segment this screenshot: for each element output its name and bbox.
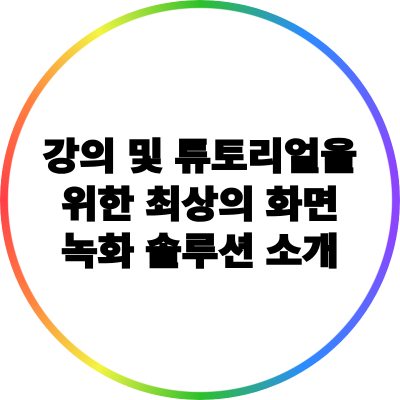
title: 강의 및 튜토리얼을 [43, 137, 357, 177]
title: 녹화 솔루션 소개 [61, 232, 339, 272]
title [42, 137, 357, 272]
title: 위한 최상의 화면 [61, 184, 339, 225]
